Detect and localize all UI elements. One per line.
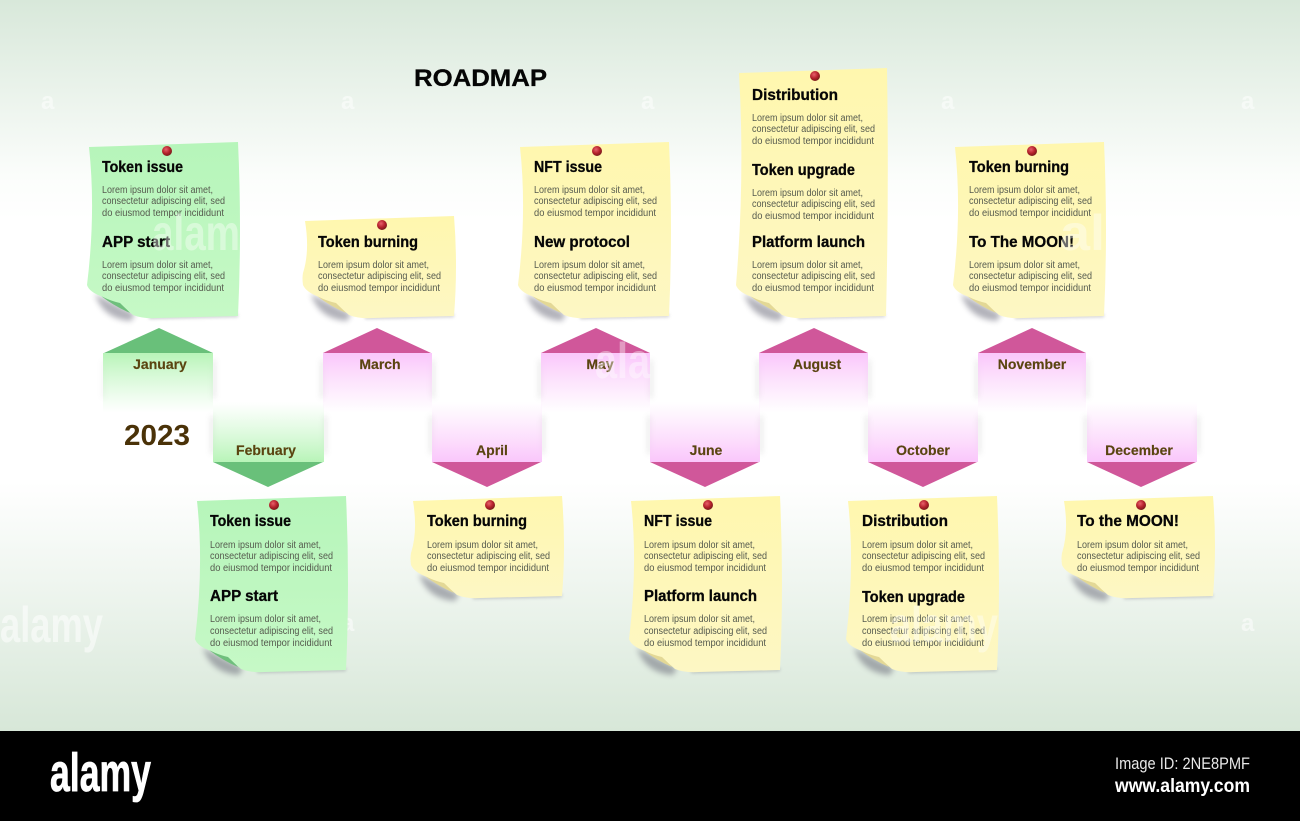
note: May xyxy=(518,142,671,321)
month: December: December xyxy=(1105,442,1173,458)
note: February: Token issue xyxy=(210,513,291,530)
year label: 2023 xyxy=(124,420,190,452)
watermarks over notes: alam xyxy=(152,205,240,261)
note: August: Lorem ipsum dolor sit amet, xyxy=(752,188,863,199)
note: June: Lorem ipsum dolor sit amet, xyxy=(644,614,755,625)
note: August: do eiusmod tempor incididunt xyxy=(752,211,874,222)
note: October: Lorem ipsum dolor sit amet, xyxy=(862,614,973,625)
month: May: May xyxy=(586,356,614,372)
note: February xyxy=(195,496,348,675)
note: October: do eiusmod tempor incididunt xyxy=(862,563,984,574)
note: February: do eiusmod tempor incididunt xyxy=(210,563,332,574)
note: June: do eiusmod tempor incididunt xyxy=(644,638,766,649)
note: April: consectetur adipiscing elit, sed xyxy=(427,551,550,562)
month: November xyxy=(978,328,1086,413)
note: August xyxy=(736,68,888,321)
note: June: Lorem ipsum dolor sit amet, xyxy=(644,540,755,551)
note: December: To the MOON! xyxy=(1077,513,1179,530)
note: October xyxy=(846,496,999,675)
watermarks over notes: al xyxy=(1060,205,1105,261)
month: April: April xyxy=(476,442,508,458)
month: April xyxy=(432,402,542,487)
month: August xyxy=(759,328,868,413)
footer bar xyxy=(0,731,1300,821)
watermarks: a xyxy=(41,88,55,115)
note: August: do eiusmod tempor incididunt xyxy=(752,283,874,294)
watermarks: a xyxy=(941,88,955,115)
watermarks over notes: alamy xyxy=(890,597,998,653)
note: November: consectetur adipiscing elit, sed xyxy=(969,196,1092,207)
month: November: November xyxy=(998,356,1067,372)
note: January: do eiusmod tempor incididunt xyxy=(102,208,224,219)
note: December: consectetur adipiscing elit, sed xyxy=(1077,551,1200,562)
note: November: Lorem ipsum dolor sit amet, xyxy=(969,185,1080,196)
note: January: do eiusmod tempor incididunt xyxy=(102,283,224,294)
note: April: Lorem ipsum dolor sit amet, xyxy=(427,540,538,551)
month: May xyxy=(541,328,650,413)
month: December xyxy=(1087,402,1197,487)
note: June xyxy=(629,496,782,675)
note: March xyxy=(302,216,456,321)
note: June: do eiusmod tempor incididunt xyxy=(644,563,766,574)
watermarks: a xyxy=(1241,610,1255,637)
note: February: Lorem ipsum dolor sit amet, xyxy=(210,614,321,625)
month: March xyxy=(323,328,432,413)
note: May: NFT issue xyxy=(534,159,602,176)
month: June: June xyxy=(690,442,723,458)
note: January: Token issue xyxy=(102,159,183,176)
month: February xyxy=(213,402,324,487)
note: November: do eiusmod tempor incididunt xyxy=(969,208,1091,219)
note: May: consectetur adipiscing elit, sed xyxy=(534,271,657,282)
note: August: Lorem ipsum dolor sit amet, xyxy=(752,113,863,124)
month: January: January xyxy=(133,356,187,372)
note: February: do eiusmod tempor incididunt xyxy=(210,638,332,649)
note: August: Distribution xyxy=(752,87,838,104)
note: June: consectetur adipiscing elit, sed xyxy=(644,551,767,562)
month: March: March xyxy=(359,356,401,372)
month: February: February xyxy=(236,442,296,458)
month: October xyxy=(868,402,978,487)
watermarks: alamy xyxy=(0,597,103,653)
note: December: Lorem ipsum dolor sit amet, xyxy=(1077,540,1188,551)
watermarks: a xyxy=(341,88,355,115)
note: January: APP start xyxy=(102,234,171,251)
note: March: consectetur adipiscing elit, sed xyxy=(318,271,441,282)
note: January: Lorem ipsum dolor sit amet, xyxy=(102,185,213,196)
note: February: consectetur adipiscing elit, sed xyxy=(210,551,333,562)
note: August: do eiusmod tempor incididunt xyxy=(752,136,874,147)
note: October: do eiusmod tempor incididunt xyxy=(862,638,984,649)
note: April xyxy=(410,496,564,601)
note: April: Token burning xyxy=(427,513,527,530)
footer url: www.alamy.com xyxy=(1114,776,1250,797)
note: December: do eiusmod tempor incididunt xyxy=(1077,563,1199,574)
note: November: consectetur adipiscing elit, sed xyxy=(969,271,1092,282)
note: August: consectetur adipiscing elit, sed xyxy=(752,199,875,210)
note: October: consectetur adipiscing elit, sed xyxy=(862,626,985,637)
watermarks: a xyxy=(341,610,355,637)
watermarks over notes: ala xyxy=(595,333,651,389)
note: October: Distribution xyxy=(862,513,948,530)
month: August: August xyxy=(793,356,841,372)
note: August: consectetur adipiscing elit, sed xyxy=(752,124,875,135)
note: August: Lorem ipsum dolor sit amet, xyxy=(752,260,863,271)
note: May: consectetur adipiscing elit, sed xyxy=(534,196,657,207)
month: October: October xyxy=(896,442,950,458)
note: June: Platform launch xyxy=(644,588,757,605)
note: May: Lorem ipsum dolor sit amet, xyxy=(534,260,645,271)
note: October: Token upgrade xyxy=(862,589,965,606)
note: August: consectetur adipiscing elit, sed xyxy=(752,271,875,282)
note: May: do eiusmod tempor incididunt xyxy=(534,283,656,294)
note: December xyxy=(1062,496,1215,601)
note: January: consectetur adipiscing elit, sed xyxy=(102,196,225,207)
watermarks over notes xyxy=(152,205,1105,653)
note: January: Lorem ipsum dolor sit amet, xyxy=(102,260,213,271)
note: May: do eiusmod tempor incididunt xyxy=(534,208,656,219)
footer image id: Image ID: 2NE8PMF xyxy=(1115,754,1250,773)
watermarks: a xyxy=(641,88,655,115)
note: March: Token burning xyxy=(318,234,418,251)
footer logo: alamy xyxy=(50,743,151,803)
note: April: do eiusmod tempor incididunt xyxy=(427,563,549,574)
note: January: consectetur adipiscing elit, sed xyxy=(102,271,225,282)
note: November xyxy=(953,142,1106,321)
note: August: Platform launch xyxy=(752,234,865,251)
note: November: do eiusmod tempor incididunt xyxy=(969,283,1091,294)
note: February: Lorem ipsum dolor sit amet, xyxy=(210,540,321,551)
watermarks: a xyxy=(1241,88,1255,115)
note: November: Token burning xyxy=(969,159,1069,176)
note: November: Lorem ipsum dolor sit amet, xyxy=(969,260,1080,271)
note: October: consectetur adipiscing elit, sed xyxy=(862,551,985,562)
month: January xyxy=(103,328,213,413)
note: February: APP start xyxy=(210,588,279,605)
title: ROADMAP xyxy=(414,65,547,92)
note: November: To The MOON! xyxy=(969,234,1074,251)
note: March: Lorem ipsum dolor sit amet, xyxy=(318,260,429,271)
note: January xyxy=(87,142,240,321)
note: February: consectetur adipiscing elit, sed xyxy=(210,626,333,637)
note: June: NFT issue xyxy=(644,513,712,530)
note: June: consectetur adipiscing elit, sed xyxy=(644,626,767,637)
note: August: Token upgrade xyxy=(752,162,855,179)
month: June xyxy=(650,402,760,487)
note: October: Lorem ipsum dolor sit amet, xyxy=(862,540,973,551)
note: May: Lorem ipsum dolor sit amet, xyxy=(534,185,645,196)
note: March: do eiusmod tempor incididunt xyxy=(318,283,440,294)
note: May: New protocol xyxy=(534,234,630,251)
watermarks xyxy=(0,88,1255,653)
